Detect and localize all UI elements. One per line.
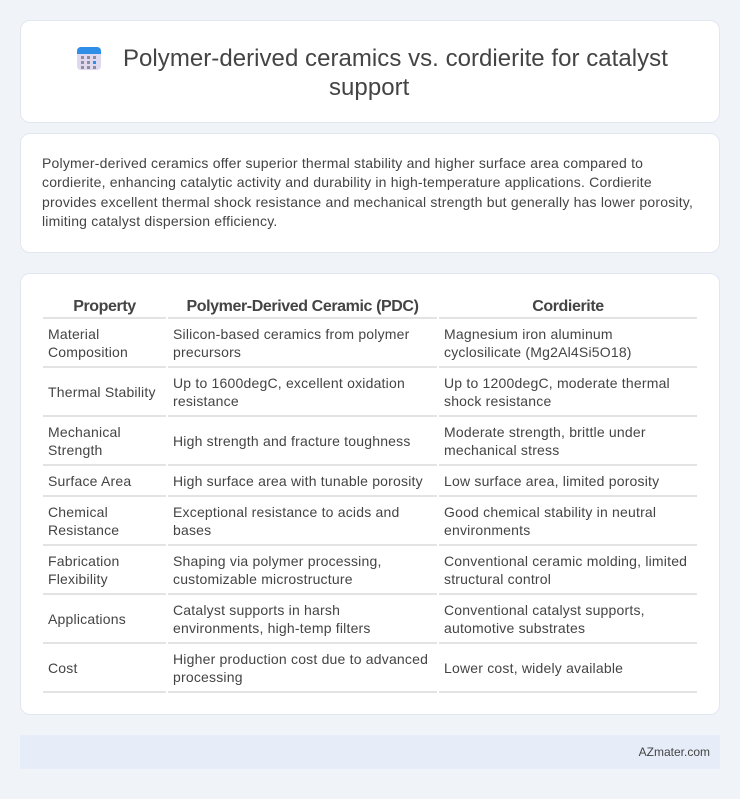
comparison table: Up to 1200degC, moderate thermal [444, 375, 670, 391]
comparison table: customizable microstructure [173, 571, 353, 587]
comparison table: Moderate strength, brittle under [444, 424, 646, 440]
comparison table: Polymer-Derived Ceramic (PDC) [186, 298, 419, 315]
comparison table: mechanical stress [444, 442, 559, 458]
comparison table: Material [48, 326, 99, 342]
comparison table: resistance [173, 393, 239, 409]
comparison table: Catalyst supports in harsh [173, 602, 340, 618]
comparison table: High strength and fracture toughness [173, 433, 411, 449]
comparison table: Thermal Stability [48, 384, 156, 400]
summary text: limiting catalyst dispersion efficiency. [42, 213, 277, 229]
comparison table: Applications [48, 611, 126, 627]
comparison table: Mechanical [48, 424, 121, 440]
comparison table panel [20, 273, 720, 715]
comparison table: Fabrication [48, 553, 119, 569]
comparison table: Cordierite [532, 298, 604, 315]
comparison table: shock resistance [444, 393, 551, 409]
comparison table: Composition [48, 344, 128, 360]
comparison table: Up to 1600degC, excellent oxidation [173, 375, 405, 391]
comparison table: Strength [48, 442, 103, 458]
comparison table: Property [73, 298, 136, 315]
comparison table: Shaping via polymer processing, [173, 553, 382, 569]
summary text: provides excellent thermal shock resistance and mechanical strength but generally has lower porosity, [42, 194, 693, 210]
comparison table: environments [444, 522, 530, 538]
title: Polymer-derived ceramics vs. cordierite for catalyst [123, 45, 668, 72]
summary text [42, 155, 693, 229]
comparison table: automotive substrates [444, 620, 585, 636]
comparison table: Cost [48, 660, 78, 676]
comparison table: Low surface area, limited porosity [444, 473, 659, 489]
comparison table: environments, high-temp filters [173, 620, 371, 636]
icon: calendar [77, 47, 101, 70]
summary text: Polymer-derived ceramics offer superior thermal stability and higher surface area compared to [42, 155, 643, 171]
footer credit: AZmater.com [639, 745, 710, 759]
comparison table: Chemical [48, 504, 108, 520]
summary text: cordierite, enhancing catalytic activity and durability in high-temperature applications. Cordierite [42, 174, 652, 190]
summary panel [20, 133, 720, 253]
comparison table: Surface Area [48, 473, 131, 489]
title: support [329, 74, 409, 101]
comparison table: Silicon-based ceramics from polymer [173, 326, 410, 342]
comparison table: bases [173, 522, 211, 538]
comparison table: Lower cost, widely available [444, 660, 623, 676]
comparison table: Higher production cost due to advanced [173, 651, 428, 667]
comparison table: precursors [173, 344, 241, 360]
comparison table: structural control [444, 571, 551, 587]
footer bar [20, 735, 720, 769]
header panel [20, 20, 720, 123]
comparison table: Conventional ceramic molding, limited [444, 553, 687, 569]
comparison table: High surface area with tunable porosity [173, 473, 423, 489]
comparison table: cyclosilicate (Mg2Al4Si5O18) [444, 344, 632, 360]
comparison table: Resistance [48, 522, 119, 538]
comparison table: Exceptional resistance to acids and [173, 504, 399, 520]
comparison table: processing [173, 669, 243, 685]
title [123, 45, 668, 101]
comparison table: Good chemical stability in neutral [444, 504, 656, 520]
comparison table: Flexibility [48, 571, 108, 587]
comparison table: Magnesium iron aluminum [444, 326, 613, 342]
comparison table: Conventional catalyst supports, [444, 602, 645, 618]
